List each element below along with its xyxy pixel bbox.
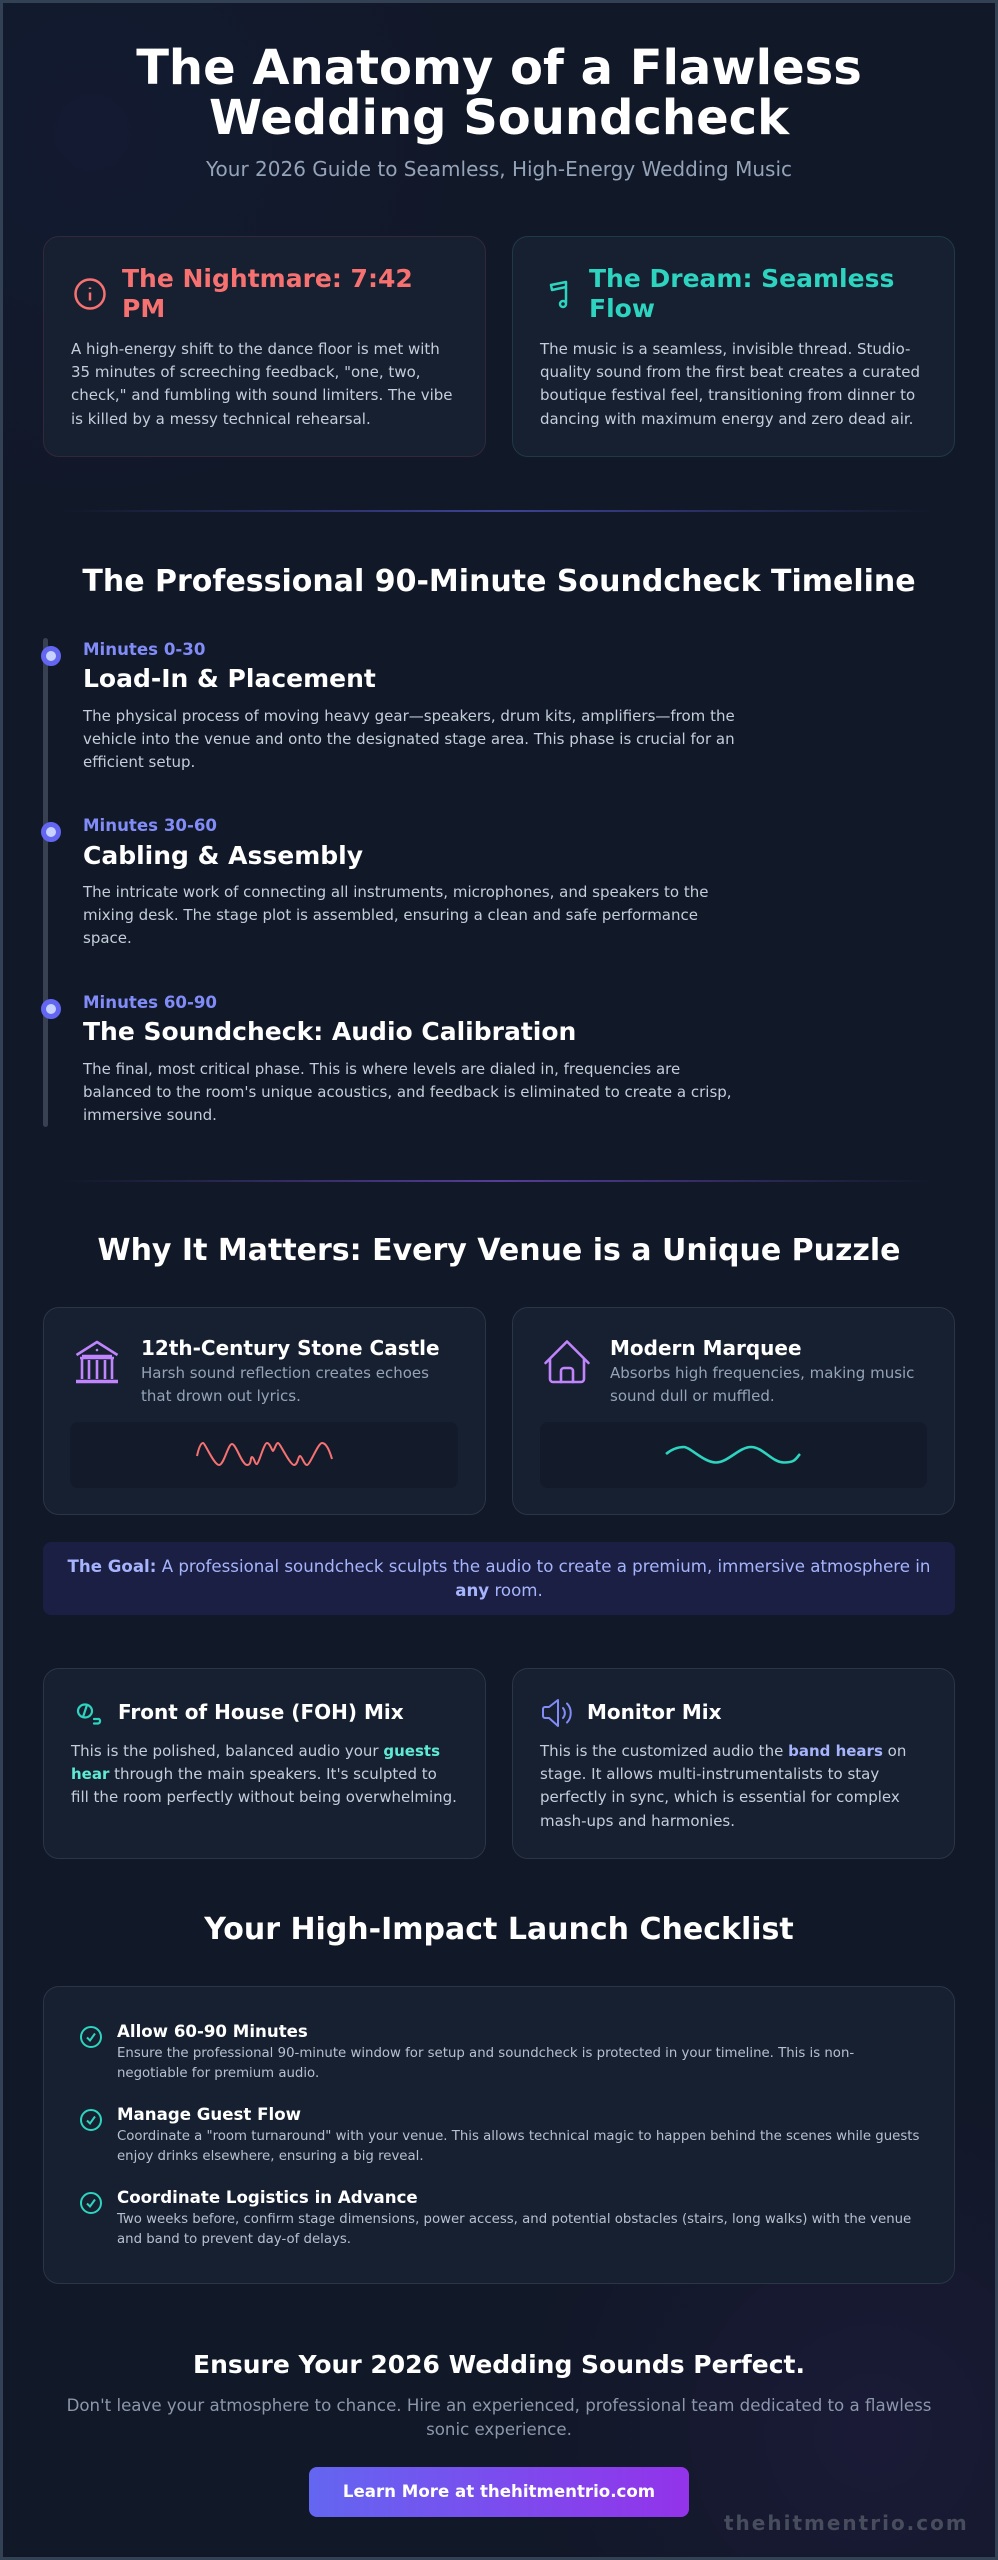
step description: immersive sound. (83, 1106, 217, 1124)
callout: the goal: The Goal: A professional soundcheck sculpts the audio to create a premium, immersive atmosphere in (68, 1557, 930, 1576)
title: The Anatomy of a Flawless (136, 40, 862, 96)
text: nightmare description: A high-energy shift to the dance floor is met with (71, 340, 440, 358)
step description: balanced to the room's unique acoustics, and feedback is eliminated to create a crisp, (83, 1083, 732, 1101)
step description: The physical process of moving heavy gear—speakers, drum kits, amplifiers—from the (83, 707, 735, 725)
title (136, 40, 862, 146)
heading: nightmare (122, 264, 413, 323)
mix description: fill the room perfectly without being overwhelming. (71, 1788, 457, 1806)
text: nightmare description (71, 340, 452, 428)
step description: vehicle into the venue and onto the designated stage area. This phase is crucial for an (83, 730, 735, 748)
step description (82, 1060, 732, 1124)
item title: Allow 60-90 Minutes (117, 2022, 308, 2041)
text: dream description: boutique festival feel, transitioning from dinner to (540, 386, 915, 404)
step heading: The Soundcheck: Audio Calibration (83, 1017, 576, 1046)
icon: house (544, 1340, 590, 1384)
subtitle: Your 2026 Guide to Seamless, High-Energy Wedding Music (206, 157, 792, 181)
text: dream description (540, 340, 920, 428)
step heading: Load-In & Placement (83, 664, 376, 693)
callout: the goal: any room. (455, 1581, 543, 1600)
mix description (540, 1742, 906, 1830)
button: learn more (309, 2467, 689, 2517)
icon: music note (550, 280, 568, 308)
heading: dream (589, 264, 894, 323)
checklist item 2 (80, 2105, 919, 2164)
mix description: stage. It allows multi-instrumentalists to stay (540, 1765, 879, 1783)
text: call to action (67, 2396, 931, 2438)
step heading: Cabling & Assembly (83, 841, 363, 870)
timeline line (43, 638, 48, 1127)
item description: negotiable for premium audio. (117, 2066, 319, 2081)
venue description (141, 1364, 429, 1405)
heading: nightmare: PM (122, 294, 165, 323)
icon: check (80, 2109, 102, 2131)
item title: Manage Guest Flow (117, 2105, 301, 2124)
waveform panel: muffled (540, 1422, 927, 1488)
venue description (610, 1364, 914, 1405)
venue description: Harsh sound reflection creates echoes (141, 1364, 429, 1382)
icon: foh (76, 1703, 102, 1725)
panel: checklist (43, 1986, 955, 2284)
item description: Two weeks before, confirm stage dimensions, power access, and potential obstacles (stairs, long walks) with the venue (117, 2212, 911, 2227)
heading: timeline: The Professional 90-Minute Soundcheck Timeline (82, 564, 916, 599)
step 3 (41, 993, 732, 1124)
mix description: mash-ups and harmonies. (540, 1812, 735, 1830)
panel: monitor mix (512, 1668, 955, 1859)
heading: dream: The Dream: Seamless (589, 264, 894, 293)
venue description: sound dull or muffled. (610, 1387, 775, 1405)
mix title: Front of House (FOH) Mix (118, 1700, 404, 1724)
timeline (41, 638, 735, 1127)
text: dream description: quality sound from the first beat creates a curated (540, 363, 920, 381)
waveform: smooth teal (665, 1446, 801, 1464)
item description (117, 2046, 854, 2081)
panel: the nightmare (43, 236, 486, 457)
mix description: This is the polished, balanced audio your guests (71, 1742, 440, 1760)
text: call to action: Don't leave your atmosphere to chance. Hire an experienced, professional team dedicated to a flawless (67, 2396, 931, 2415)
item description (116, 2212, 911, 2247)
item description (117, 2129, 919, 2164)
step description: The intricate work of connecting all instruments, microphones, and speakers to the (83, 883, 708, 901)
step 1 (41, 640, 735, 771)
waveform panel: echo (70, 1422, 458, 1488)
dot (41, 646, 61, 666)
item description: Ensure the professional 90-minute window for setup and soundcheck is protected in your timeline. This is non- (117, 2046, 854, 2061)
venue name: Modern Marquee (610, 1336, 802, 1360)
item description: enjoy drinks elsewhere, ensuring a big reveal. (117, 2149, 424, 2164)
item description: Coordinate a "room turnaround" with your venue. This allows technical magic to happen behind the scenes while guests (117, 2129, 919, 2144)
step description (82, 883, 708, 947)
step description: mixing desk. The stage plot is assembled, ensuring a clean and safe performance (83, 906, 698, 924)
button: learn more: Learn More at thehitmentrio.com (343, 2482, 655, 2501)
panel: stone castle (43, 1307, 486, 1515)
panel: front of house mix (43, 1668, 486, 1859)
checklist item 1 (80, 2022, 854, 2081)
text: nightmare description: check," and fumbling with sound limiters. The vibe (71, 386, 452, 404)
item title: Coordinate Logistics in Advance (117, 2188, 418, 2207)
panel: modern marquee (512, 1307, 955, 1515)
panel: the dream (512, 236, 955, 457)
checklist item 3 (80, 2188, 911, 2247)
text: dream description: The music is a seamless, invisible thread. Studio- (540, 340, 910, 358)
mix title: Monitor Mix (587, 1700, 722, 1724)
heading: checklist: Your High-Impact Launch Checklist (204, 1912, 794, 1947)
callout: the goal (43, 1542, 955, 1615)
dot (41, 822, 61, 842)
text: dream description: dancing with maximum energy and zero dead air. (540, 410, 913, 428)
icon: speaker (542, 1699, 572, 1727)
text: nightmare description: is killed by a messy technical rehearsal. (71, 410, 371, 428)
time label: Minutes 0-30 (83, 640, 205, 659)
mix description: perfectly in sync, which is essential for complex (540, 1788, 900, 1806)
heading: why it matters: Why It Matters: Every Venue is a Unique Puzzle (97, 1233, 901, 1268)
icon: check (80, 2026, 102, 2048)
venue description: Absorbs high frequencies, making music (610, 1364, 914, 1382)
step description: efficient setup. (83, 753, 195, 771)
text: nightmare description: 35 minutes of screeching feedback, "one, two, (71, 363, 421, 381)
heading: call to action: Ensure Your 2026 Wedding Sounds Perfect. (193, 2350, 805, 2379)
mix description: hear through the main speakers. It's sculpted to (71, 1765, 437, 1783)
time label: Minutes 30-60 (83, 816, 217, 835)
time label: Minutes 60-90 (83, 993, 217, 1012)
icon: check (80, 2192, 102, 2214)
icon: info circle (74, 278, 106, 310)
venue description: that drown out lyrics. (141, 1387, 301, 1405)
item description: and band to prevent day-of delays. (117, 2232, 351, 2247)
title: Wedding Soundcheck (209, 90, 789, 146)
heading: nightmare: The Nightmare: 7:42 (122, 264, 413, 293)
step description: The final, most critical phase. This is where levels are dialed in, frequencies are (83, 1060, 680, 1078)
mix description (70, 1742, 457, 1806)
dot (41, 999, 61, 1019)
step 2 (41, 816, 708, 947)
heading: dream: Flow (589, 294, 655, 323)
icon: castle (76, 1340, 118, 1384)
step description: space. (83, 929, 132, 947)
waveform: jagged red (196, 1442, 333, 1466)
text: call to action: sonic experience. (426, 2420, 572, 2438)
mix description: This is the customized audio the band hears on (540, 1742, 906, 1760)
venue name: 12th-Century Stone Castle (141, 1336, 440, 1360)
step description (82, 707, 735, 771)
watermark: thehitmentrio.com (724, 2511, 969, 2535)
